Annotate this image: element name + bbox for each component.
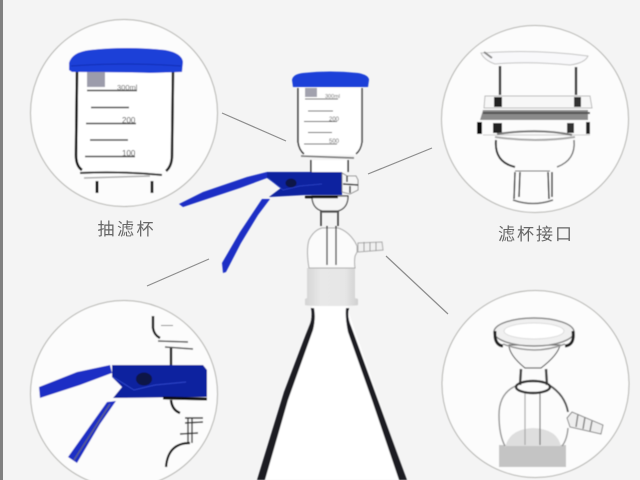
connector line: adapter [386,256,448,314]
icon: main filter assembly: 500 [329,139,340,145]
connector line: cup joint [368,148,432,174]
icon: suction flask [257,268,407,480]
heading: cup joint label: 滤杯接口 [498,225,574,244]
icon: clamp arm [39,365,112,398]
icon: lower handle [222,199,270,273]
hose barb [358,242,383,252]
panel: filter cup circle [30,20,218,206]
connector line: clamp [147,259,209,286]
icon: clamp screw [342,173,358,194]
icon: main filter assembly: 200 [329,117,340,123]
lower funnel [312,196,348,211]
icon: glass funnel top [509,345,560,368]
left edge strip [0,0,3,480]
icon: blue lid [69,48,183,73]
icon: main filter assembly [179,72,383,273]
heading: filter cup label: 抽滤杯 [98,220,156,239]
connector line: filter cup [222,113,286,141]
panel: cup joint circle [442,26,628,212]
label patch [305,88,317,97]
icon: glass joint [477,52,592,204]
icon: clamp arm [179,172,267,207]
stem [311,160,348,172]
icon: main filter assembly: 300ml [325,94,340,100]
pivot screw [286,178,296,188]
panel: filter cup circle: 300ml [117,83,138,92]
frosted neck [305,268,358,306]
icon: adapter bulb [499,385,518,446]
icon: hose barb [567,412,603,434]
lower fragment [163,398,207,399]
icon: clamp jaw [112,365,207,398]
neck [321,210,338,226]
icon: blue lid [292,72,369,87]
icon: side-arm bulb [308,228,357,268]
icon: frosted joint [499,445,566,467]
panel: filter cup circle: 200 [122,116,136,125]
icon: neck [520,369,547,385]
scale marks [85,90,137,156]
panel: clamp circle [30,300,218,480]
icon: cup fragment [153,316,160,338]
icon: lower handle [68,401,116,463]
panel: adapter circle [442,290,629,478]
icon: beaker glass [76,72,173,171]
icon: clamp jaw [267,172,342,197]
icon: cup body [297,88,363,155]
label patch [87,72,105,87]
panel: filter cup circle: 100 [122,149,136,158]
pivot screw [136,372,152,386]
scale marks [304,99,338,144]
